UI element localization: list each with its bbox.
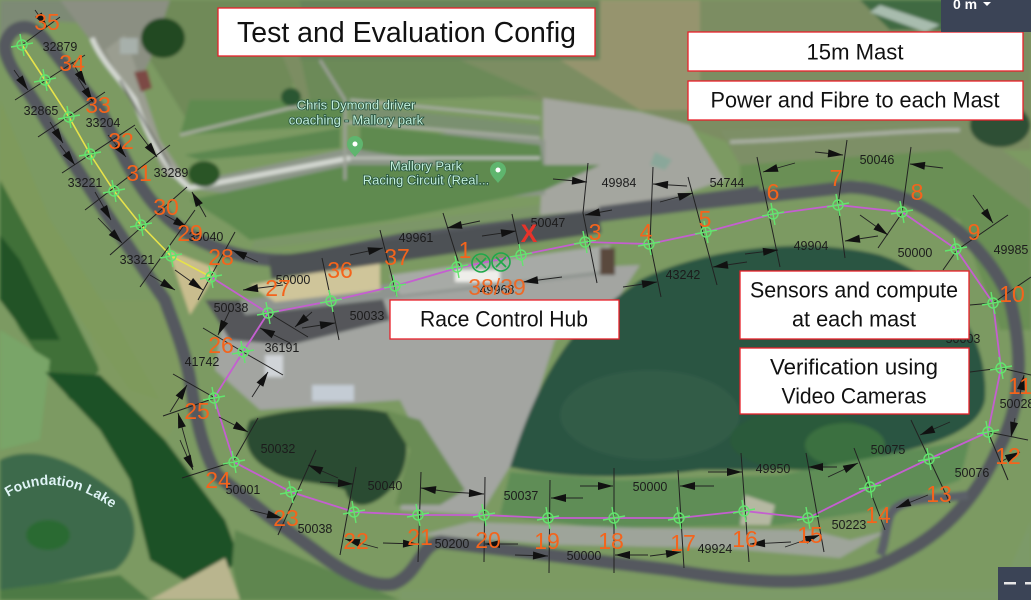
magenta mast route [211, 205, 1001, 518]
mast numbers: 14 [865, 502, 891, 528]
dimension values: 33289 [154, 166, 188, 180]
mast numbers: 34 [59, 50, 85, 76]
dimension values: 33221 [68, 176, 102, 190]
mast numbers: 9 [968, 219, 980, 245]
buildings [120, 38, 138, 54]
mast numbers: 15 [797, 522, 823, 548]
dimension values: 50038 [298, 522, 332, 536]
callout: Verification: Video Cameras [782, 384, 926, 408]
circled hub masts 38 and 39 [472, 253, 510, 272]
dimension values: 50038 [214, 301, 248, 315]
dimension values: 49968 [480, 283, 514, 297]
mast numbers: 7 [830, 165, 842, 191]
mast numbers: 1 [459, 237, 471, 263]
dimension values: 50040 [368, 479, 402, 493]
mast numbers: 33 [85, 92, 111, 118]
dimension values: 50032 [261, 442, 295, 456]
mast numbers: 16 [732, 526, 758, 552]
dimension values: 49950 [756, 462, 790, 476]
map place labels: Chris Dymond driver [297, 98, 416, 112]
callout: Verification: Verification using [770, 354, 938, 380]
dimension values: 32865 [24, 104, 58, 118]
dimension values: 49961 [399, 231, 433, 245]
callout: Power and Fibre: Power and Fibre to each Mast [710, 88, 1000, 112]
mast numbers: 20 [475, 527, 501, 553]
mast numbers: 38/39 [468, 274, 526, 300]
dimension values: 49904 [794, 239, 828, 253]
dimension values: 50037 [504, 489, 538, 503]
mast numbers: 31 [126, 160, 152, 186]
callout: Sensors and compute: Sensors and compute [750, 278, 958, 302]
callout: Sensors and compute: at each mast [792, 306, 916, 332]
mast numbers: 6 [767, 179, 779, 205]
yellow straight route [22, 45, 211, 277]
dimension values: 50003 [946, 332, 980, 346]
mast numbers: 37 [384, 244, 410, 270]
foundation lake [0, 454, 135, 590]
dimension values: 50200 [435, 537, 469, 551]
dimension values: 50047 [531, 216, 565, 230]
callout: 15m Mast: 15m Mast [806, 40, 904, 64]
mast numbers: 28 [208, 244, 234, 270]
map place labels [4, 98, 489, 507]
dimension values: 50000 [633, 480, 667, 494]
map pins [347, 136, 506, 183]
dimension values: 50000 [898, 246, 932, 260]
dimension values: 54744 [710, 176, 744, 190]
mast numbers: 24 [205, 467, 231, 493]
dimension values: 32879 [43, 40, 77, 54]
right grass [740, 150, 1031, 330]
mast numbers: 3 [589, 219, 601, 245]
dimension values: 50076 [955, 466, 989, 480]
dimension values: 36191 [265, 341, 299, 355]
mast numbers: 19 [534, 528, 560, 554]
white service road [92, 38, 350, 188]
map place labels: Foundation Lake [4, 474, 115, 507]
callout: Sensors and compute [740, 271, 969, 339]
mast numbers: 22 [343, 528, 369, 554]
callout: Verification [740, 348, 969, 414]
title box: Test and Evaluation Config [237, 17, 576, 49]
callout: Race Control Hub: Race Control Hub [420, 306, 588, 332]
callout: Race Control Hub [390, 300, 619, 339]
mast numbers: 21 [407, 524, 433, 550]
dimension values: 50000 [567, 549, 601, 563]
map place labels: Mallory Park [390, 158, 463, 174]
dimension values: 35040 [189, 230, 223, 244]
shore grass [500, 440, 970, 528]
mast numbers: 5 [699, 206, 711, 232]
map scale control [941, 0, 1031, 32]
dimension values: 50075 [871, 443, 905, 457]
title box [218, 8, 595, 56]
mast numbers: 4 [640, 219, 653, 245]
mast numbers: 12 [995, 443, 1021, 469]
fields top [130, 0, 300, 125]
mast numbers: 27 [265, 275, 291, 301]
dimension values: 50001 [226, 483, 260, 497]
inner infield / pits [215, 265, 640, 515]
dimension values: 50046 [860, 153, 894, 167]
bottom field [150, 558, 240, 600]
trees [141, 18, 185, 58]
callout: 15m Mast [688, 32, 1023, 71]
mast numbers: 29 [177, 220, 203, 246]
dimension values: 33321 [120, 253, 154, 267]
dimension values: 50000 [276, 273, 310, 287]
dimension values: 49984 [602, 176, 636, 190]
callout: Power and Fibre [688, 81, 1023, 120]
big lake [510, 246, 985, 476]
top-left grey corner [0, 0, 130, 40]
mast numbers: 23 [273, 505, 299, 531]
dimension values: 49985 [994, 243, 1028, 257]
mast numbers: 35 [34, 9, 60, 35]
dimension values: 33204 [86, 116, 120, 130]
red X marker: X [521, 220, 538, 248]
map zoom control [998, 567, 1031, 600]
dimension values: 50223 [832, 518, 866, 532]
dimension values: 50033 [350, 309, 384, 323]
map place labels: coaching - Mallory park [289, 112, 424, 128]
mast numbers: 10 [999, 281, 1025, 307]
mast numbers: 32 [108, 128, 134, 154]
dimension values: 49924 [698, 542, 732, 556]
tarmac apron [540, 98, 725, 215]
small lake [246, 408, 406, 505]
mast numbers: 36 [327, 257, 353, 283]
left dark tree belts [0, 180, 100, 400]
dimension values: 43242 [666, 268, 700, 282]
mast numbers: 30 [153, 194, 179, 220]
map place labels: Racing Circuit (Real... [363, 172, 489, 188]
tan triangle [168, 250, 215, 315]
mast numbers: 13 [926, 481, 952, 507]
mast numbers: 18 [598, 528, 624, 554]
mast numbers: 26 [208, 332, 234, 358]
mast numbers: 8 [911, 179, 923, 205]
dimension values: 41742 [185, 355, 219, 369]
mast numbers: 25 [184, 398, 210, 424]
mast numbers: 17 [670, 530, 696, 556]
